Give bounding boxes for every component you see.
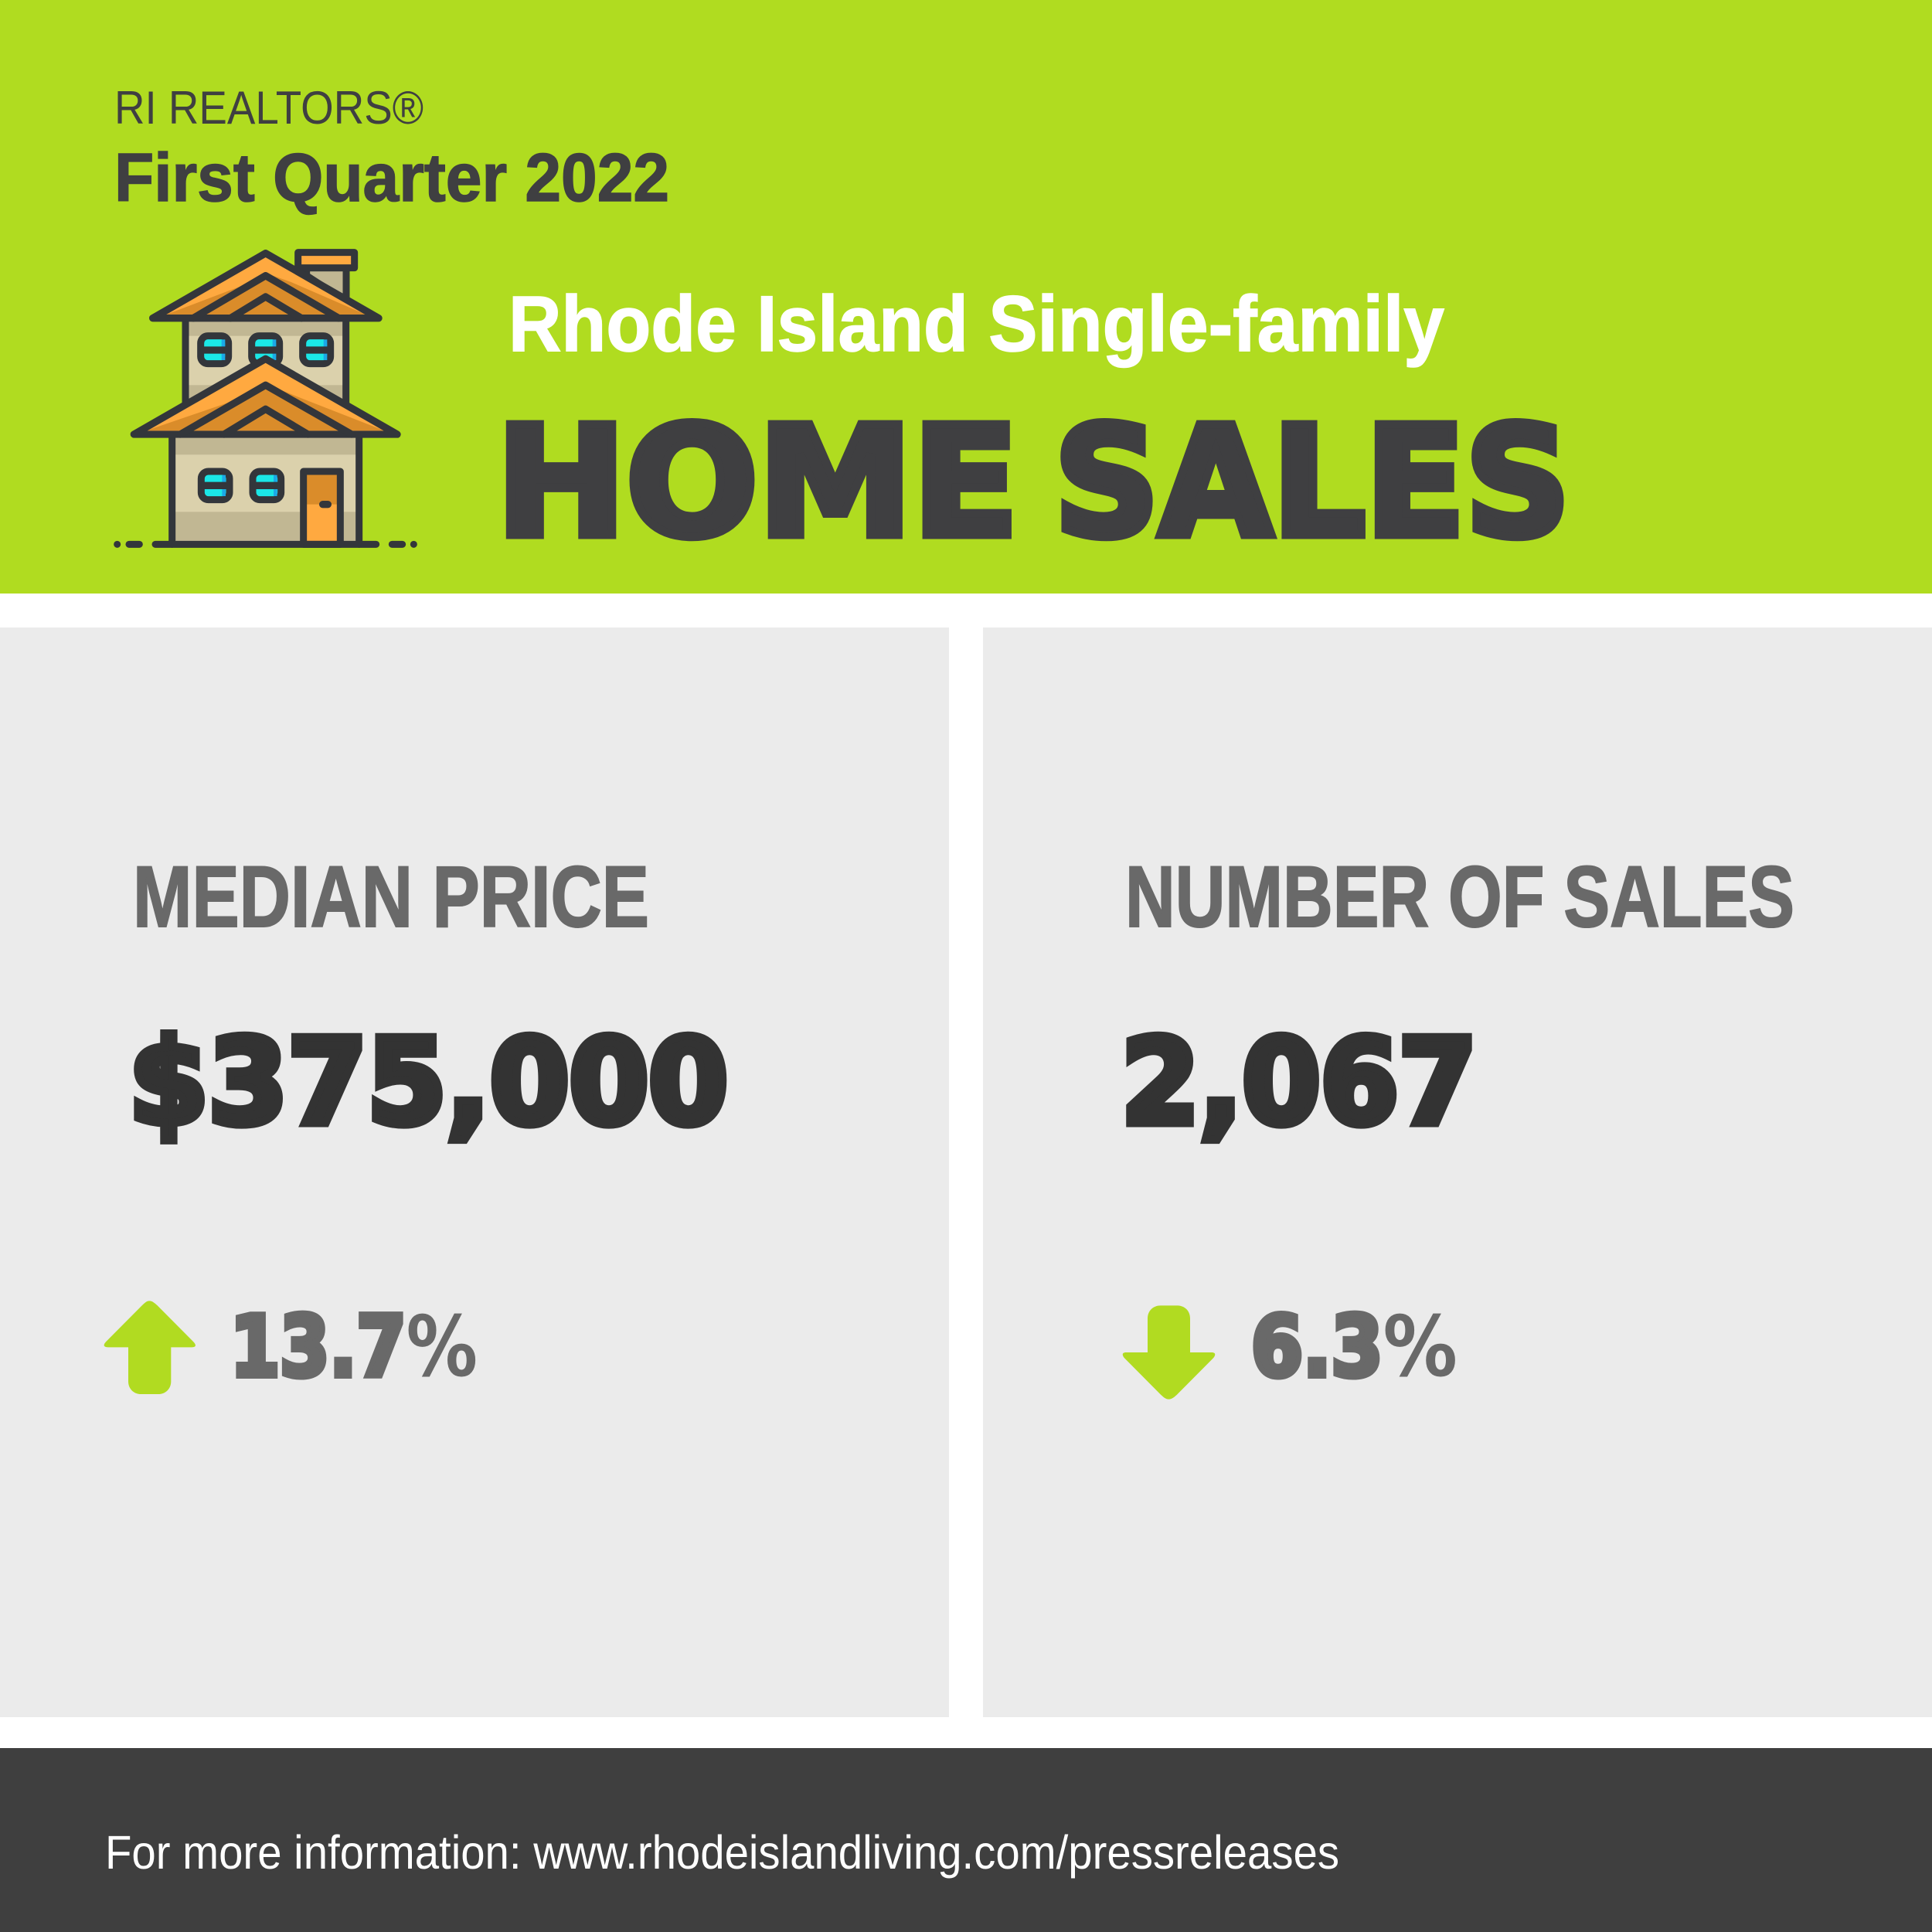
title: HOME SALES: SALES <box>1054 395 1570 571</box>
icon: down arrow <box>1123 1305 1215 1400</box>
icon: house <box>117 253 413 544</box>
ground line <box>117 534 413 555</box>
panel: median price <box>0 628 949 1717</box>
value: 2,067: 2,067 <box>1121 1014 1477 1151</box>
lower walls <box>172 434 359 544</box>
footer band <box>0 1748 1932 1932</box>
title: HOME SALES <box>496 395 1570 571</box>
upper roof <box>153 253 379 318</box>
lower windows <box>201 471 281 500</box>
icon: up arrow <box>104 1301 196 1394</box>
footer text: For more information: www.rhodeislandliving.com/pressreleases <box>105 1826 1339 1879</box>
header band <box>0 0 1932 594</box>
value: $375,000: $375,000 <box>129 1014 728 1151</box>
door <box>304 471 340 544</box>
upper walls <box>185 318 346 406</box>
chimney <box>298 253 355 301</box>
subtitle: First Quarter 2022: First Quarter 2022 <box>114 139 669 216</box>
eyebrow: RI REALTORS: RI REALTORS® <box>114 82 423 134</box>
title line: Rhode Island Single-family: Rhode Island Single-family <box>509 280 1444 368</box>
panel: number of sales <box>983 628 1932 1717</box>
upper windows <box>201 336 331 364</box>
title: HOME SALES: HOME <box>496 395 1019 571</box>
change: 13.7%: 13.7% <box>230 1299 478 1396</box>
heading: MEDIAN PRICE: MEDIAN PRICE <box>133 849 649 945</box>
lower roof <box>134 359 397 434</box>
change: 6.3%: 6.3% <box>1251 1299 1458 1396</box>
